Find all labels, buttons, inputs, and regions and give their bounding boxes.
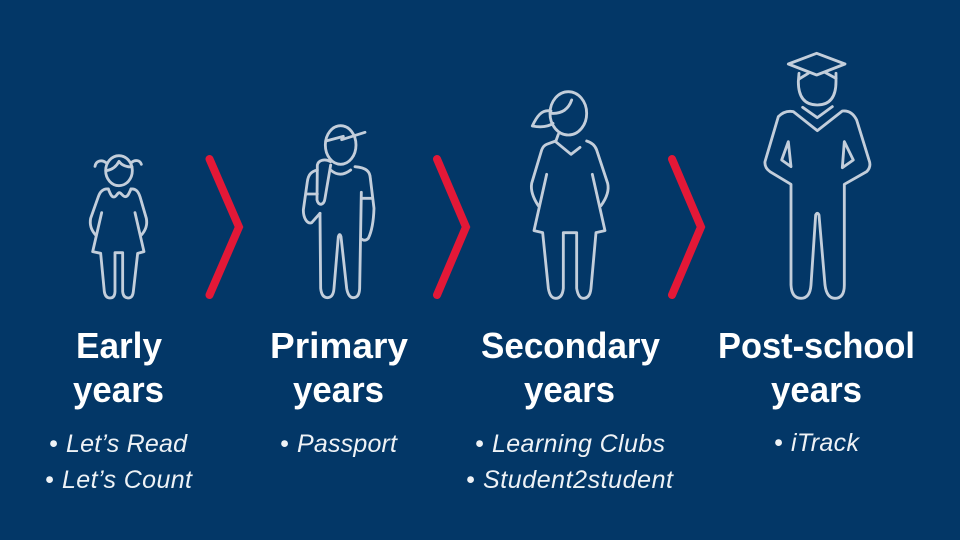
heading: Early years: years: [73, 369, 164, 410]
list: early years programs: •: [49, 430, 58, 458]
icon: young girl with pigtails: [90, 156, 147, 298]
heading: Primary years: Primary: [270, 325, 408, 366]
heading: Early years: Early: [76, 325, 162, 366]
icon: teenage girl with ponytail: [531, 92, 608, 298]
arrow: chevron 2: [437, 159, 466, 295]
icon: boy with cap and backpack: [303, 126, 374, 298]
list: early years programs: •: [45, 466, 54, 494]
heading: Post-school years: Post-school: [718, 325, 915, 366]
list: post-school programs: iTrack: [791, 429, 860, 457]
heading: Primary years: years: [293, 369, 384, 410]
list: secondary years programs: [466, 430, 674, 494]
list: primary years programs: •: [280, 430, 289, 458]
arrow: chevron 1: [210, 159, 239, 295]
heading: Post-school years: [718, 325, 915, 410]
heading: Secondary years: Secondary: [481, 325, 660, 366]
list: early years programs: Let’s Read: [66, 430, 188, 458]
list: primary years programs: Passport: [297, 430, 398, 458]
list: secondary years programs: Learning Clubs: [492, 430, 665, 458]
list: early years programs: [45, 430, 193, 494]
heading: Secondary years: years: [524, 369, 615, 410]
list: early years programs: Let’s Count: [62, 466, 193, 494]
list: secondary years programs: •: [475, 430, 484, 458]
heading: Early years: [73, 325, 164, 410]
heading: Primary years: [270, 325, 408, 410]
icon: graduate with mortarboard: [765, 53, 870, 298]
list: post-school programs: •: [774, 429, 783, 457]
list: secondary years programs: Student2student: [483, 466, 674, 494]
list: secondary years programs: •: [466, 466, 475, 494]
heading: Post-school years: years: [771, 369, 862, 410]
heading: Secondary years: [481, 325, 660, 410]
arrow: chevron 3: [672, 159, 701, 295]
